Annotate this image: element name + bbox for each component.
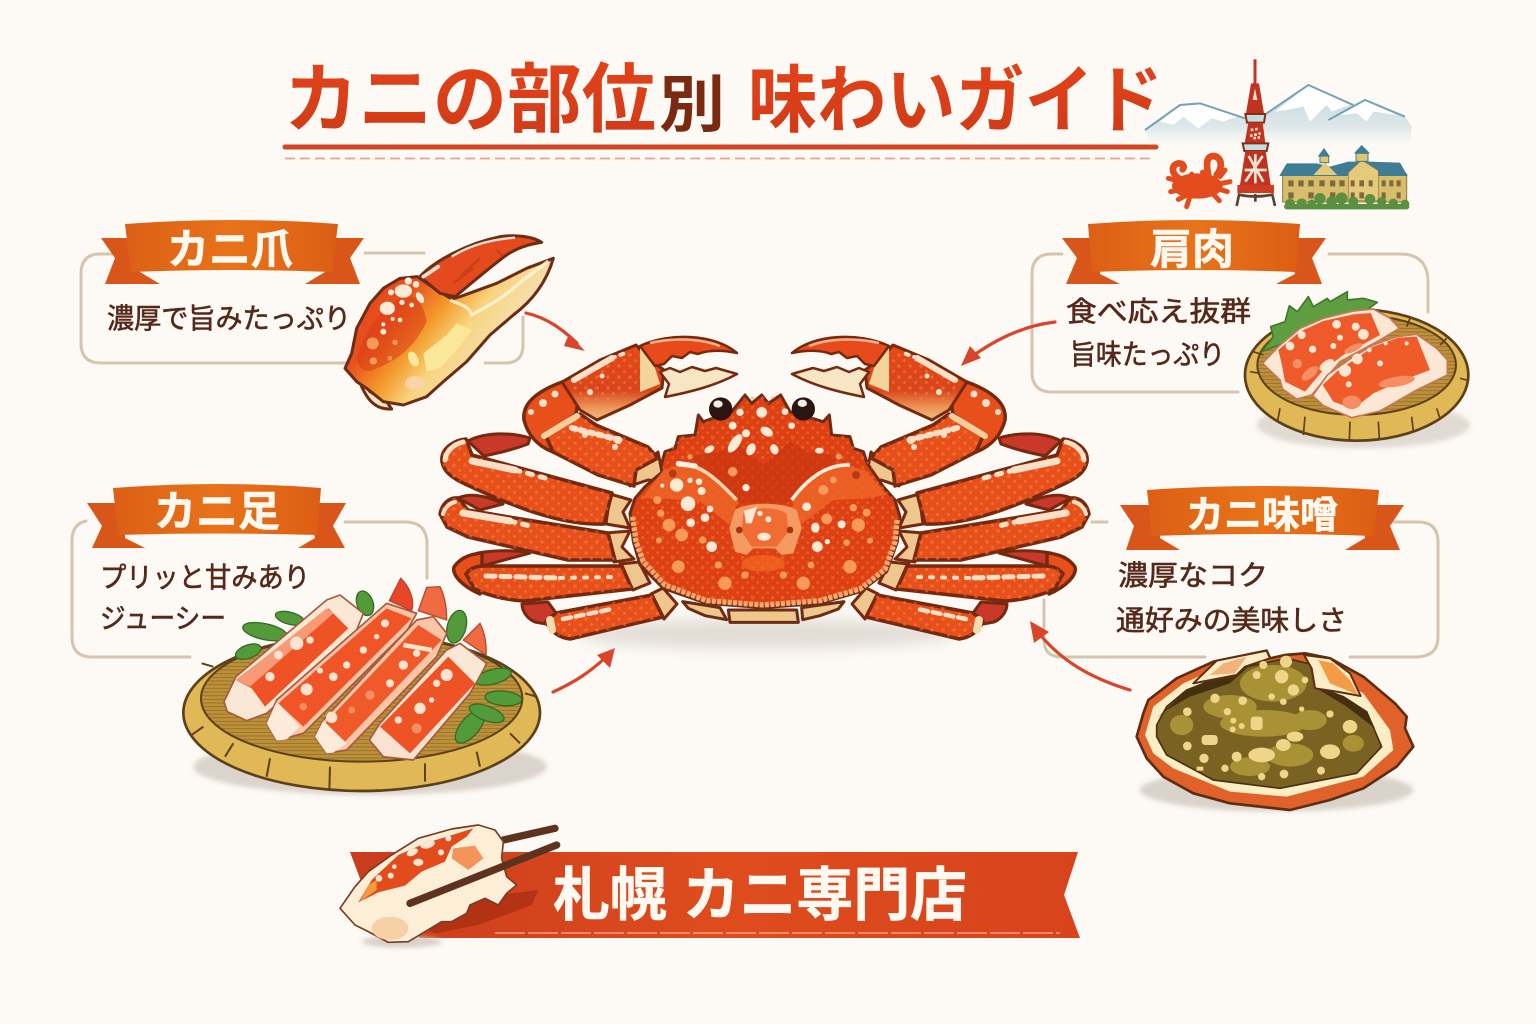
panel frame	[1032, 254, 1428, 392]
ribbon: shoulder meat: 肩肉	[1150, 226, 1234, 273]
text: crab legs description: ジューシー	[100, 603, 226, 634]
central crab illustration	[440, 337, 1089, 649]
meat piece 2	[267, 603, 417, 741]
title underline	[285, 147, 1156, 158]
ribbon: crab claw: カニ爪	[167, 226, 293, 273]
crab right legs and claw	[792, 337, 1089, 639]
panel frame	[81, 253, 523, 363]
arrow: shoulder to crab	[961, 322, 1055, 366]
ribbon: crab legs: カニ足	[154, 488, 280, 535]
garnish leaves	[234, 589, 522, 748]
meat piece 4	[369, 643, 487, 760]
ground shadow	[575, 619, 955, 649]
leaves	[1262, 292, 1377, 352]
icon: crab meat with chopsticks	[340, 825, 557, 948]
ribbon: shoulder meat	[1062, 220, 1326, 284]
bottom rim highlight	[633, 517, 897, 605]
text: crab miso description: 通好みの美味しさ	[1116, 605, 1347, 636]
text: crab miso description	[1116, 560, 1347, 636]
panel: crab miso	[1044, 486, 1438, 812]
panel: shoulder meat	[1032, 220, 1470, 448]
crab left legs and claw	[440, 337, 737, 639]
dark centre	[690, 442, 840, 503]
ribbon: crab claw	[101, 220, 364, 284]
text: shoulder meat description: 旨味たっぷり	[1070, 339, 1225, 370]
illustration: crab claw	[345, 236, 553, 409]
centre face plate	[729, 504, 802, 555]
illustration: shoulder meat on bamboo plate	[1245, 292, 1470, 448]
text: crab claw description: 濃厚で旨みたっぷり	[107, 303, 351, 334]
miso mounds	[1170, 665, 1364, 776]
panel frame	[72, 521, 427, 657]
ribbon: crab miso: カニ味噌	[1186, 495, 1338, 537]
small crab	[1168, 156, 1230, 207]
text: shoulder meat description	[1066, 296, 1251, 370]
arrow: crab miso to crab	[1030, 621, 1130, 690]
meat piece 1	[224, 595, 487, 760]
meat piece 3	[315, 617, 447, 753]
text: shoulder meat description: 食べ応え抜群	[1066, 296, 1251, 327]
arrow: crab legs to crab	[553, 648, 615, 692]
title: カニの部位	[284, 58, 656, 143]
crab eyes	[709, 397, 815, 421]
panel: crab claw	[81, 220, 553, 409]
title	[284, 58, 1163, 143]
shell flaps	[1193, 651, 1270, 683]
mountains	[1145, 85, 1412, 147]
title: 味わいガイド	[748, 59, 1163, 142]
panel frame	[1044, 522, 1438, 657]
text: crab legs description: プリッと甘みあり	[100, 562, 310, 593]
text: crab miso description: 濃厚なコク	[1118, 560, 1268, 591]
light speckles	[660, 407, 846, 552]
text: crab legs description	[100, 562, 310, 634]
orange lobes	[642, 462, 738, 525]
illustration: crab legs on bamboo plate	[183, 578, 547, 795]
footer banner	[340, 825, 1080, 948]
panel: crab legs	[72, 484, 547, 795]
ribbon: crab legs	[87, 484, 346, 548]
rim plates	[683, 602, 844, 622]
leg tips	[389, 578, 413, 611]
illustration: crab miso in shell	[1137, 651, 1413, 812]
crab carapace and eyes	[630, 395, 900, 622]
shoulder meat pieces	[1263, 309, 1399, 399]
shell	[630, 395, 900, 608]
red TV tower	[1237, 59, 1275, 206]
banner shop name: 札幌 カニ専門店	[553, 863, 967, 928]
title: 別	[659, 71, 725, 140]
arrow: crab claw to crab	[526, 313, 585, 351]
ribbon: crab miso	[1120, 486, 1404, 550]
clock tower building	[1279, 145, 1409, 209]
Sapporo skyline illustration	[1145, 59, 1412, 209]
